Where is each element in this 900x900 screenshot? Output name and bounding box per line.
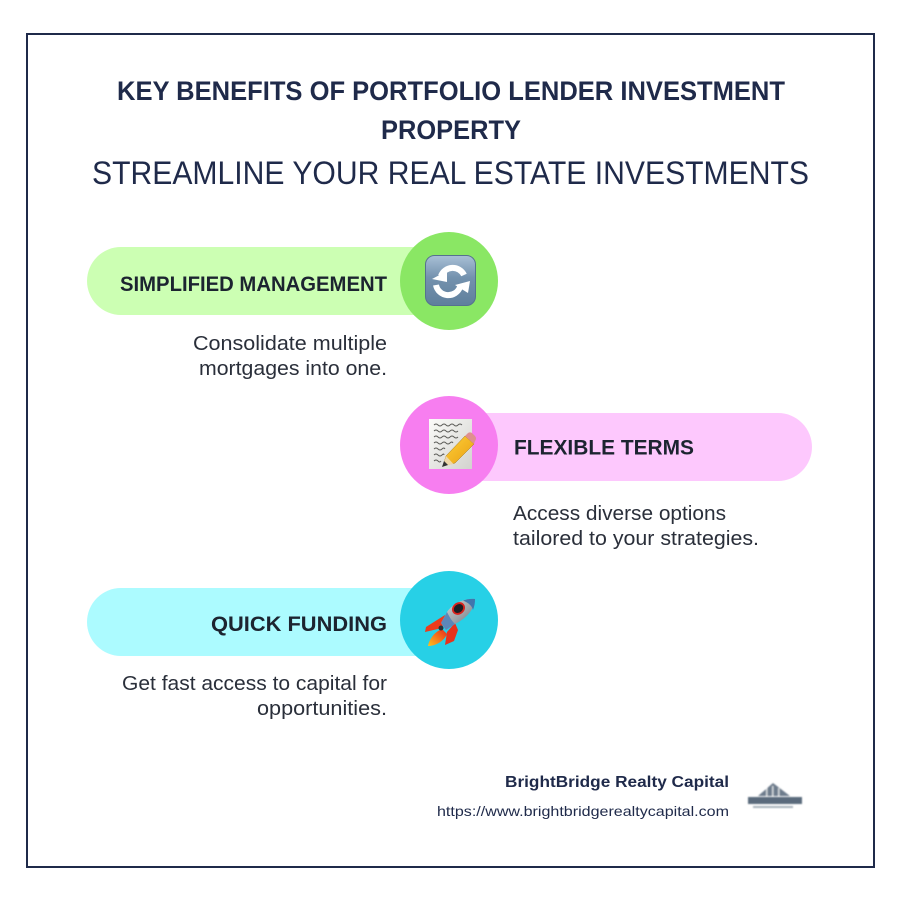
icon: refresh arrows <box>426 256 476 306</box>
icon circle: cyan <box>400 571 498 669</box>
description: quick funding: Get fast access to capital for <box>122 673 387 695</box>
description: flexible terms: Access diverse options <box>513 503 726 525</box>
website url: https://www.brightbridgerealtycapital.com <box>437 803 729 819</box>
footer: company details <box>437 774 729 819</box>
heading: flexible terms: FLEXIBLE TERMS <box>514 436 694 460</box>
heading: quick funding: QUICK FUNDING <box>211 613 387 636</box>
icon circle: pink <box>400 396 498 494</box>
title: KEY BENEFITS OF PORTFOLIO LENDER INVESTMENT <box>117 76 785 106</box>
icon circle: green <box>400 232 498 330</box>
logo: bridge building <box>748 783 802 808</box>
description: flexible terms: tailored to your strategies. <box>513 528 759 550</box>
title <box>117 76 785 145</box>
description: simplified management: mortgages into one. <box>199 358 387 380</box>
pill: simplified management <box>87 247 450 315</box>
pill: flexible terms <box>450 413 812 481</box>
description: quick funding: opportunities. <box>257 698 387 720</box>
pill: quick funding <box>87 588 450 656</box>
description: simplified management <box>193 333 387 380</box>
description: flexible terms <box>513 503 759 550</box>
panel: quick funding <box>87 571 498 720</box>
title: PROPERTY <box>381 115 521 145</box>
company name: BrightBridge Realty Capital <box>505 774 729 791</box>
description: simplified management: Consolidate multiple <box>193 333 387 355</box>
heading: simplified management: SIMPLIFIED MANAGEMENT <box>120 273 387 296</box>
subtitle: STREAMLINE YOUR REAL ESTATE INVESTMENTS <box>92 155 809 191</box>
icon: rocket <box>425 599 475 646</box>
icon: memo and pencil <box>429 419 476 469</box>
description: quick funding <box>122 673 387 720</box>
panel: flexible terms <box>400 396 812 550</box>
panel: simplified management <box>87 232 498 380</box>
